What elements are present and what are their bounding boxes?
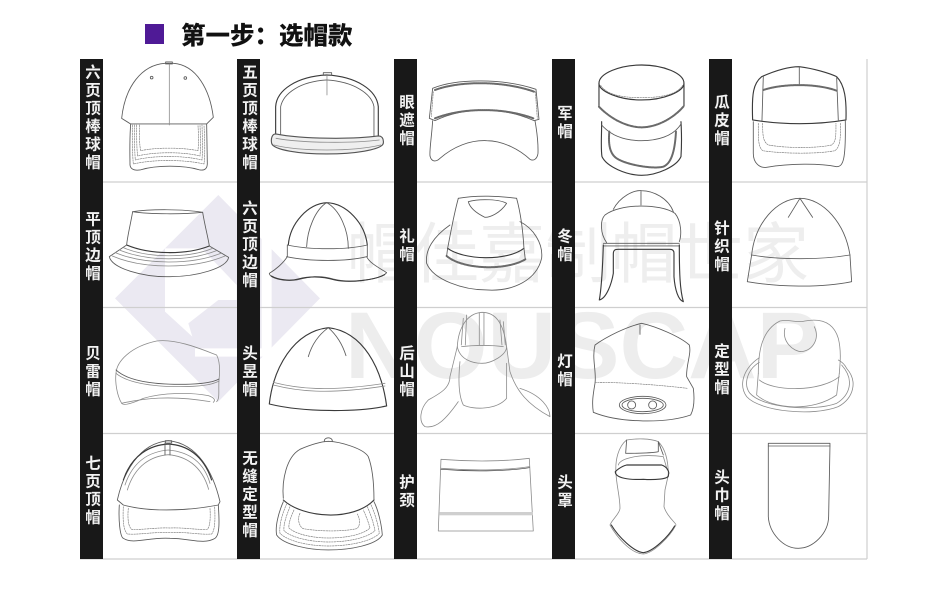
panel: hat 眼遮帽: [397, 81, 539, 161]
label bars: [80, 59, 732, 559]
icon: shaped hat: [743, 320, 853, 412]
grid frame: [80, 59, 867, 559]
label: 冬帽: [555, 227, 573, 264]
label: 头罩: [555, 474, 573, 510]
panel: hat 七页顶帽: [83, 441, 220, 541]
label: 护颈: [397, 474, 415, 510]
watermark: brand name chinese: 帽佳嘉制帽世家: [347, 217, 809, 291]
panel: hat 后山帽: [397, 312, 550, 427]
icon: baseball cap: [122, 62, 213, 170]
panel: hat 平顶边帽: [83, 210, 229, 283]
label: 瓜皮帽: [712, 94, 730, 148]
icon: five panel cap: [752, 67, 846, 167]
heading marker: [145, 24, 164, 44]
icon: head scarf: [768, 443, 830, 548]
icon: balaclava: [610, 439, 676, 554]
label: 军帽: [555, 105, 573, 141]
icon: skull cap: [269, 328, 387, 411]
icon: seamless snapback: [276, 438, 382, 550]
label: 后山帽: [397, 345, 415, 399]
panel: hat 军帽: [555, 65, 684, 175]
label: 六页顶边帽: [240, 200, 258, 290]
label: 五页顶棒球帽: [240, 64, 258, 172]
label: 定型帽: [712, 342, 730, 397]
panel: hat 头巾帽: [712, 443, 830, 548]
panel: hat 瓜皮帽: [712, 67, 846, 167]
title: 第一步：选帽款: [181, 21, 353, 50]
label: 头巾帽: [712, 469, 730, 523]
icon: military cap: [599, 65, 684, 175]
label: 针织帽: [712, 220, 730, 274]
icon: visor: [429, 81, 539, 161]
label: 平顶边帽: [83, 211, 101, 283]
panel: hat 贝雷帽: [83, 341, 220, 404]
icon: bucket hat: [109, 210, 229, 277]
icon: neck flap cap: [421, 312, 550, 427]
label: 无缝定型帽: [240, 450, 258, 540]
icon: lamp cap: [593, 323, 694, 421]
watermark: brand name latin: NOUSCAP: [345, 293, 820, 399]
panel: hat 针织帽: [712, 198, 852, 286]
icon: seven panel cap: [117, 441, 220, 541]
label: 头昱帽: [240, 345, 258, 399]
panel: hat 六页顶棒球帽: [83, 62, 213, 172]
panel: hat 头罩: [555, 439, 676, 554]
label: 七页顶帽: [83, 455, 101, 527]
panel: hat 护颈: [397, 458, 533, 531]
icon: beret cap: [116, 341, 220, 404]
panel: hat 头昱帽: [240, 328, 387, 411]
icon: knit beanie: [747, 198, 852, 286]
panel: hat 礼帽: [397, 196, 542, 290]
panel: hat 五页顶棒球帽: [240, 64, 383, 172]
watermark: diamond logo: [115, 195, 320, 402]
label: 灯帽: [555, 353, 573, 389]
panel: hat 无缝定型帽: [240, 438, 382, 550]
icon: six panel brim hat: [269, 203, 387, 281]
panel: hat 灯帽: [555, 323, 694, 421]
panel: hat 定型帽: [712, 320, 853, 412]
label: 六页顶棒球帽: [83, 64, 101, 172]
icon: neck gaiter: [438, 458, 533, 531]
icon: flat brim cap: [271, 73, 383, 154]
panel: hat 冬帽: [555, 191, 683, 302]
label: 眼遮帽: [397, 94, 415, 148]
label: 贝雷帽: [83, 345, 101, 399]
icon: fedora: [426, 196, 542, 290]
panel: hat 六页顶边帽: [240, 200, 387, 290]
label: 礼帽: [397, 227, 415, 264]
icon: winter hat: [599, 191, 683, 302]
